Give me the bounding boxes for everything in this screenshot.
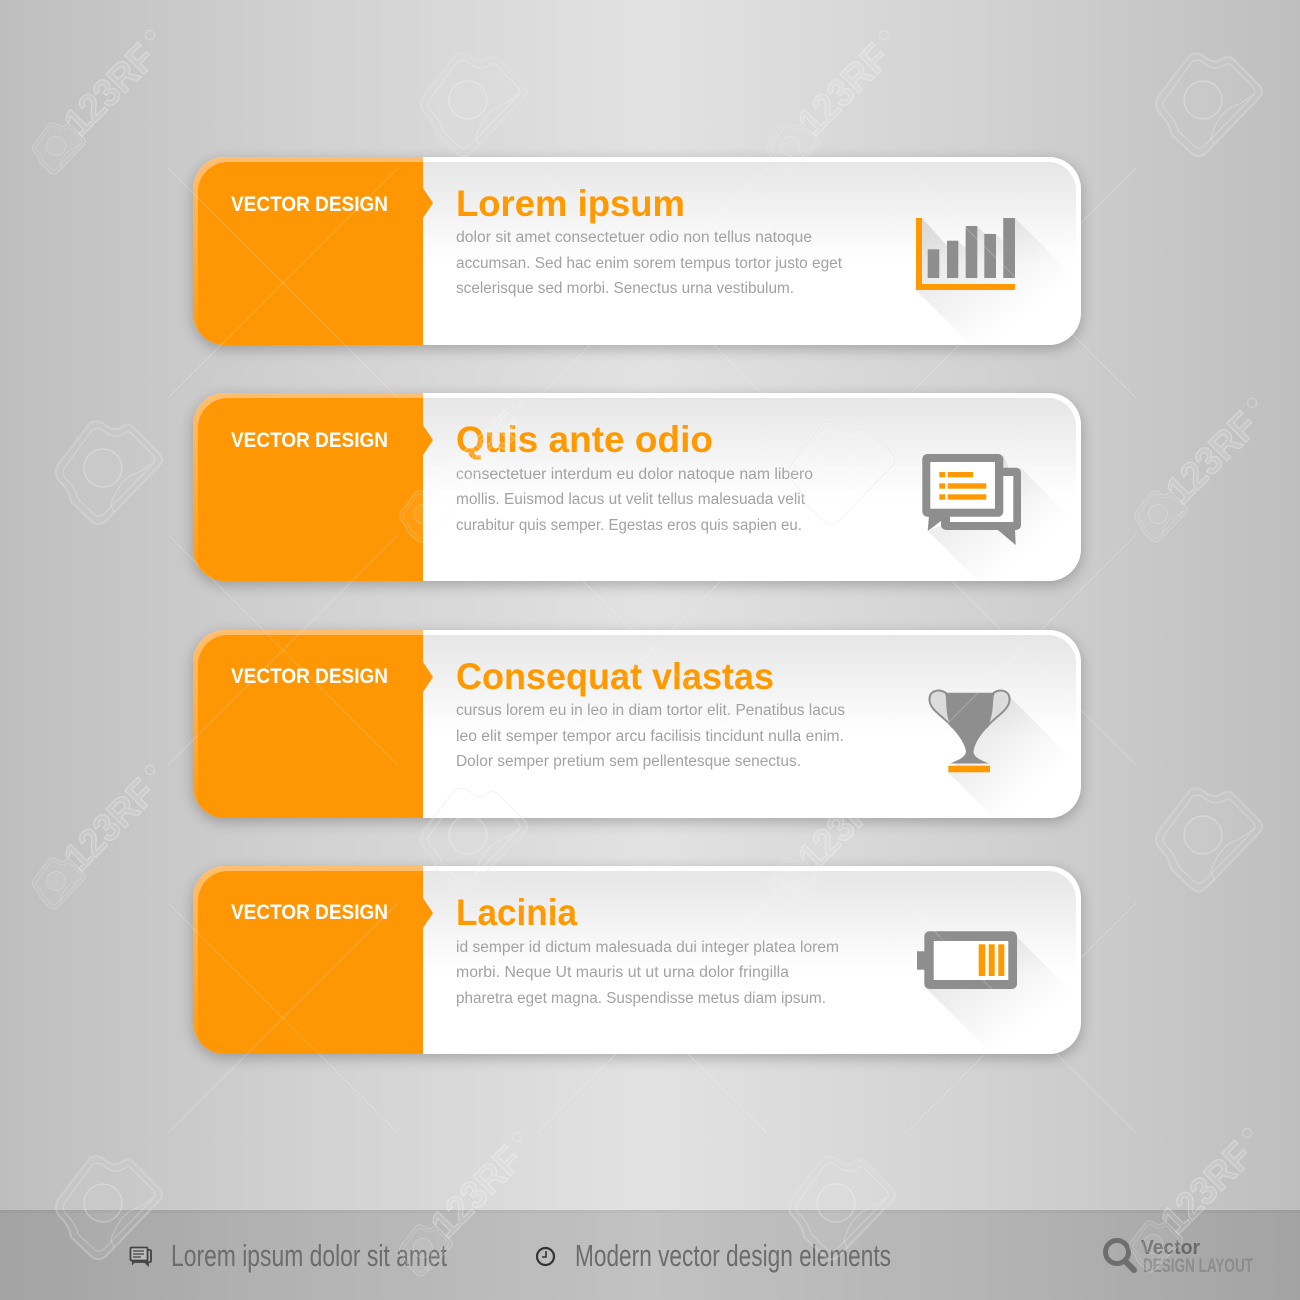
- watermark 123RF top left: 123RF: [56, 36, 164, 144]
- text block: morbi. Neque Ut mauris ut ut urna dolor fringilla: [456, 964, 789, 981]
- text block: mollis. Euismod lacus ut velit tellus malesuada velit: [456, 491, 806, 508]
- text block: Dolor semper pretium sem pellentesque senectus.: [456, 753, 801, 770]
- panel: card 1 Lorem ipsum: [193, 157, 1081, 349]
- watermark 123RF top right: [766, 30, 898, 174]
- watermark 123RF bottom right: [1130, 1128, 1261, 1272]
- watermark 123RF top right: 123RF: [790, 36, 898, 144]
- label: VECTOR DESIGN: [231, 193, 388, 216]
- text block: dolor sit amet consectetuer odio non tellus natoque: [456, 229, 812, 246]
- panel: card 2 Quis ante odio: [193, 393, 1081, 585]
- icon: bar chart: [916, 218, 1015, 290]
- panel: card 4 Lacinia: [193, 866, 1081, 1058]
- icon: trophy: [929, 691, 1010, 772]
- logo: DESIGN LAYOUT: [1143, 1256, 1253, 1277]
- text block: [456, 702, 845, 770]
- text block: leo elit semper tempor arcu facilisis tincidunt nulla enim.: [456, 728, 844, 745]
- logo: [1106, 1237, 1253, 1277]
- watermark 123RF second row right: 123RF: [1158, 404, 1266, 512]
- text block: cursus lorem eu in leo in diam tortor elit. Penatibus lacus: [456, 702, 845, 719]
- text block: curabitur quis semper. Egestas eros quis sapien eu.: [456, 517, 802, 534]
- watermark 123RF bottom left: 123RF: [423, 1138, 531, 1246]
- heading: Lacinia: [456, 892, 577, 933]
- text block: id semper id dictum malesuada dui integer platea lorem: [456, 939, 839, 956]
- watermark 123RF second row left: [400, 398, 531, 542]
- panel: card 3 Consequat vlastas: [193, 630, 1081, 822]
- watermark 123RF second row right: [1134, 398, 1266, 542]
- footer text: Modern vector design elements: [575, 1238, 891, 1273]
- watermark 123RF second row left: 123RF: [423, 404, 531, 512]
- text block: consectetuer interdum eu dolor natoque nam libero: [456, 466, 813, 483]
- watermark 123RF bottom right: 123RF: [1153, 1134, 1261, 1242]
- panel: footer band: [0, 1210, 1300, 1300]
- icon: battery: [917, 931, 1017, 989]
- text block: pharetra eget magna. Suspendisse metus diam ipsum.: [456, 990, 826, 1007]
- watermark 123RF third row left: [32, 766, 164, 909]
- watermark 123RF third row left: 123RF: [56, 771, 164, 879]
- logo: Vector: [1141, 1237, 1200, 1259]
- icon: chat bubbles: [922, 454, 1021, 545]
- watermark 123RF bottom left: [400, 1132, 531, 1276]
- label: VECTOR DESIGN: [231, 429, 388, 452]
- text block: [456, 466, 813, 534]
- text block: scelerisque sed morbi. Senectus urna vestibulum.: [456, 280, 794, 297]
- icon: clock: [537, 1248, 554, 1265]
- text block: [456, 939, 839, 1007]
- watermark 123RF third row right: [766, 766, 898, 909]
- heading: Lorem ipsum: [456, 183, 685, 224]
- text block: accumsan. Sed hac enim sorem tempus tortor justo eget: [456, 255, 843, 272]
- watermark 123RF top left: [32, 30, 164, 174]
- footer text: Lorem ipsum dolor sit amet: [171, 1238, 447, 1273]
- heading: Quis ante odio: [456, 419, 713, 460]
- text block: [456, 229, 843, 297]
- heading: Consequat vlastas: [456, 656, 774, 697]
- watermark 123RF third row right: 123RF: [790, 771, 898, 879]
- icon: chat: [130, 1248, 151, 1265]
- label: VECTOR DESIGN: [231, 901, 388, 924]
- label: VECTOR DESIGN: [231, 665, 388, 688]
